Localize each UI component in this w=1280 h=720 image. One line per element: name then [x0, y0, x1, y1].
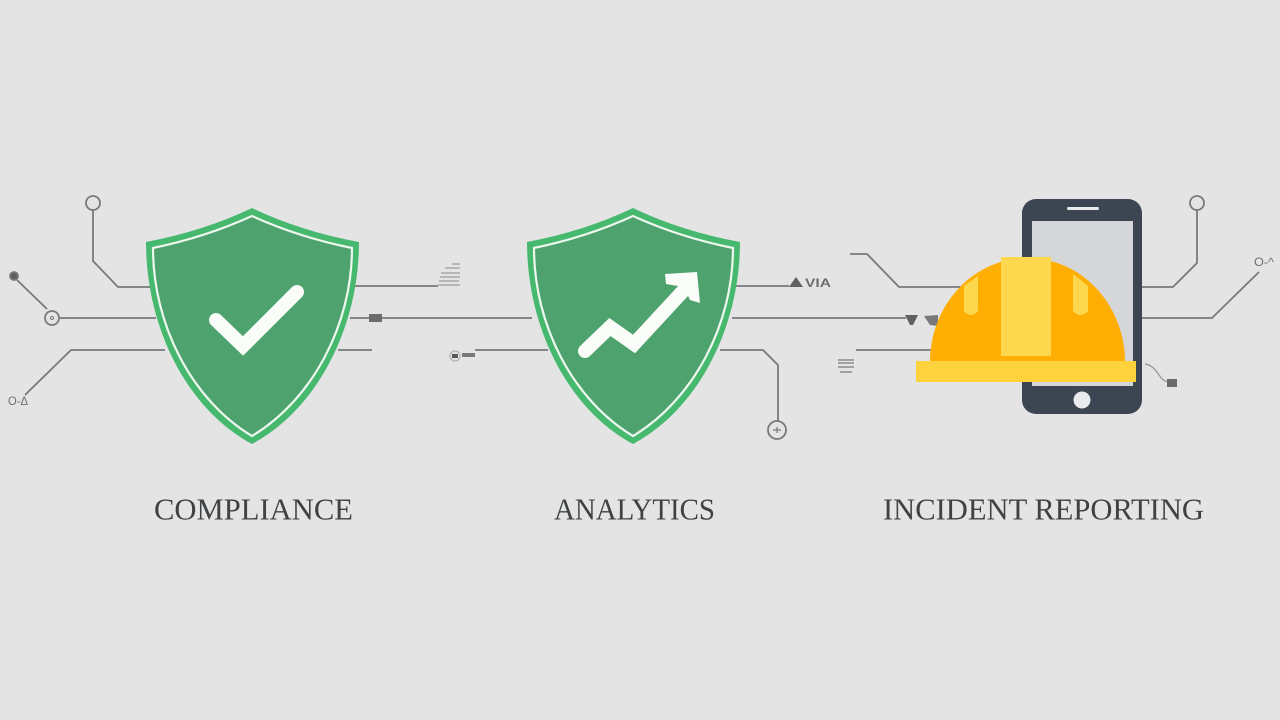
icon: rising arrow	[585, 272, 700, 351]
icon: compliance shield with check mark	[146, 208, 359, 444]
label: compliance: COMPLIANCE	[154, 492, 353, 526]
circuit lines: left of compliance shield: O-Δ	[8, 394, 28, 408]
circuit lines: right of phone: O-^	[1254, 255, 1274, 269]
hard hat centre stripe	[1001, 257, 1051, 356]
label: incident reporting: INCIDENT REPORTING	[883, 492, 1204, 526]
icon: hard hat	[916, 257, 1136, 382]
circuit lines: between compliance and analytics shields	[338, 264, 548, 361]
circuit lines: between analytics shield and phone: VIA	[805, 276, 831, 290]
icon: analytics shield with rising arrow	[527, 208, 740, 444]
circuit lines: left of compliance shield	[8, 196, 165, 408]
icon: check mark	[216, 292, 297, 346]
label: analytics: ANALYTICS	[554, 492, 715, 526]
icon: phone	[1022, 199, 1142, 414]
hard hat right rib	[1073, 274, 1088, 315]
hard hat left rib	[964, 276, 978, 315]
phone home button	[1074, 392, 1090, 408]
phone speaker	[1067, 207, 1099, 210]
hard hat brim	[916, 361, 1136, 382]
phone screen	[1032, 221, 1133, 386]
circuit lines: right of phone	[1140, 196, 1274, 387]
circuit lines: between analytics shield and phone	[720, 254, 965, 439]
